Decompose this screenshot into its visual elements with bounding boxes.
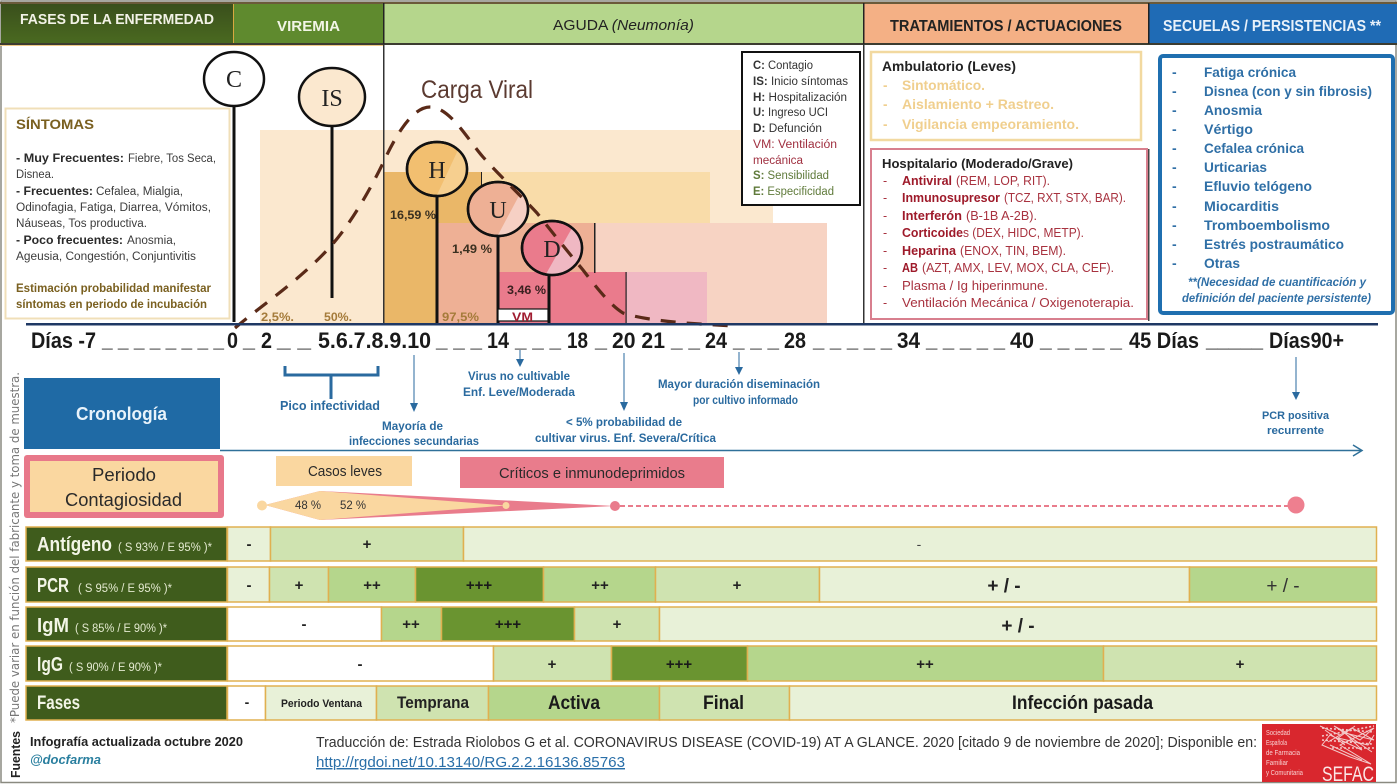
row: IgG: IgG [37, 654, 63, 676]
footer: update note: @docfarma [30, 752, 101, 767]
marker: U ingreso UCI [468, 182, 528, 323]
panel: sintomas: Cefalea, Mialgia, [96, 186, 183, 198]
panel: secuelas: Urticarias [1204, 159, 1267, 175]
panel: sintomas: Náuseas, Tos productiva. [16, 218, 147, 230]
row: PCR: ++ [363, 577, 381, 594]
axis: days: 20 21 [612, 328, 665, 353]
row: fases: - [245, 694, 250, 710]
panel: sintomas: Ageusia, Congestión, Conjuntivitis [16, 251, 196, 263]
panel: hospitalario: Hospitalario (Moderado/Grave) [882, 157, 1073, 171]
annotation: infecciones secundarias: Mayoría de [382, 421, 443, 433]
annotation: pico infectividad [280, 366, 380, 413]
header row [0, 2, 1397, 46]
panel: secuelas: - [1172, 236, 1177, 252]
row: PCR: + [733, 577, 742, 594]
marker: IS inicio sintomas: IS [321, 86, 343, 112]
row: IgM [26, 607, 1376, 641]
panel: secuelas: Estrés postraumático [1204, 236, 1344, 252]
label: criticos e inmunodeprimidos [460, 457, 724, 488]
row: fases: Final [703, 693, 744, 714]
panel: secuelas: - [1172, 83, 1177, 99]
panel: ambulatorio: - [883, 97, 888, 112]
vertical note: *Puede variar en función del fabricante y toma de muestra. [8, 372, 22, 723]
axis: days: _ _ [276, 327, 312, 352]
panel: ambulatorio: - [883, 78, 888, 93]
logo: SEFAC: Sociedad [1266, 730, 1290, 737]
header row: AGUDA (Neumonía) [553, 17, 694, 34]
panel: sintomas: Odinofagia, Fatiga, Diarrea, Vómitos, [16, 202, 211, 214]
arrow: timeline [220, 445, 1362, 456]
panel: hospitalario: - [883, 296, 887, 310]
panel: sintomas: Disnea. [16, 169, 54, 181]
logo: SEFAC: de Farmacia [1266, 750, 1300, 757]
spindle: contagiousness duration [257, 491, 1304, 520]
footer: update note: Infografía actualizada octubre 2020 [30, 734, 243, 749]
panel: hospitalario: s (DEX, HIDC, METP). [963, 226, 1084, 240]
header row: VIREMIA [277, 18, 340, 35]
legend: U: Ingreso UCI [753, 107, 828, 119]
row: fases: Infección pasada [1012, 693, 1153, 714]
annotation: menos de 5 por ciento [535, 353, 717, 445]
panel: cronologia: Cronología [76, 404, 168, 424]
panel: hospitalario: - [883, 209, 887, 223]
panel: hospitalario: Corticoide [902, 226, 963, 240]
panel: secuelas: Otras [1204, 255, 1240, 271]
row: IgG [26, 646, 1376, 681]
axis: days: _ [594, 327, 608, 352]
panel: secuelas: - [1172, 140, 1177, 156]
row: PCR [26, 567, 1376, 602]
row: IgG: ++ [916, 656, 934, 673]
legend [742, 52, 860, 205]
panel: secuelas: Disnea (con y sin fibrosis) [1204, 83, 1372, 99]
axis: days: 14 [487, 328, 510, 353]
panel: secuelas: definición del paciente persistente) [1182, 291, 1371, 305]
row: PCR: - [246, 577, 252, 594]
axis: days: 0 [227, 328, 238, 353]
panel: ambulatorio [871, 52, 1141, 140]
panel: hospitalario: - [883, 261, 887, 275]
footer: citation: Traducción de: Estrada Riolobos G et al. CORONAVIRUS DISEASE (COVID-19) AT A GLANCE. 2020 [citado 9 de noviembre de 2020]; Disponible en: [316, 735, 1257, 751]
panel: hospitalario: - [883, 244, 887, 258]
panel: secuelas: - [1172, 217, 1177, 233]
axis: days: 24 [705, 328, 728, 353]
row: antigeno: ( S 93% / E 95% )* [118, 542, 213, 554]
panel: periodo contagiosidad: Periodo [92, 465, 156, 485]
panel: sintomas: Estimación probabilidad manifestar [16, 283, 212, 295]
annotation: mayor duracion [658, 352, 820, 407]
panel: secuelas [1160, 56, 1393, 313]
label: casos leves: Casos leves [308, 463, 382, 480]
panel: hospitalario: Antiviral [902, 174, 952, 188]
marker: D defuncion: D [543, 237, 561, 263]
panel: hospitalario: Interferón [902, 209, 962, 223]
row: IgM: - [302, 616, 306, 633]
row: PCR: + [295, 577, 304, 594]
footer: update note [30, 734, 243, 767]
panel: secuelas: - [1172, 64, 1177, 80]
legend: VM: Ventilación [753, 139, 837, 151]
spindle: contagiousness duration: 52 % [340, 498, 366, 512]
axis: days: 45 Días [1129, 328, 1199, 353]
axis: days: Días90+ [1269, 328, 1344, 353]
panel: hospitalario: (TCZ, RXT, STX, BAR). [1004, 191, 1126, 205]
percentages: 3,46 % [507, 283, 546, 297]
logo: SEFAC: Española [1266, 740, 1287, 747]
marker: U ingreso UCI: U [489, 198, 507, 224]
row: fases: Periodo Ventana [281, 698, 363, 710]
panel: ambulatorio: Aislamiento + Rastreo. [902, 97, 1054, 112]
row: IgG: + [548, 656, 557, 673]
percentages: 50%. [324, 310, 352, 324]
axis: days: Días -7 [31, 328, 96, 353]
panel: periodo contagiosidad: Contagiosidad [65, 490, 182, 510]
axis: days: _ [242, 327, 256, 352]
panel: hospitalario: (AZT, AMX, LEV, MOX, CLA, CEF). [922, 261, 1114, 275]
annotation: pico infectividad: Pico infectividad [280, 399, 380, 413]
row: IgM: ++ [402, 616, 420, 633]
legend: D: Defunción [753, 123, 822, 135]
marker: H hospitalizacion: H [428, 158, 446, 184]
panel: ambulatorio: Sintomático. [902, 78, 985, 93]
axis: days: 28 [784, 328, 806, 353]
panel: sintomas: Fiebre, Tos Seca, [128, 153, 216, 165]
panel: hospitalario: Plasma / Ig hiperinmune. [902, 279, 1048, 293]
legend: E: Especificidad [753, 186, 834, 198]
logo: SEFAC: y Comunitaria [1266, 770, 1303, 777]
marker: C contagio: C [226, 67, 242, 93]
legend: C: Contagio [753, 60, 813, 72]
panel: hospitalario: (ENOX, TIN, BEM). [960, 244, 1066, 258]
panel: secuelas: Anosmia [1204, 102, 1262, 118]
annotation: menos de 5 por ciento: < 5% probabilidad de [566, 417, 682, 429]
marker: IS inicio sintomas [299, 68, 365, 298]
annotation: virus no cultivable [463, 350, 576, 399]
panel: sintomas: - Muy Frecuentes: [16, 153, 124, 165]
panel: secuelas: - [1172, 159, 1177, 175]
row: IgG: +++ [666, 656, 692, 673]
annotation: virus no cultivable: Enf. Leve/Moderada [463, 387, 576, 399]
axis: days: _ _ _ _ _ _ _ _ [101, 327, 225, 352]
percentages: 97,5% [442, 310, 479, 324]
axis: days: _ _ _ [732, 327, 780, 352]
percentages: 1,49 % [452, 242, 492, 256]
row: PCR: PCR [37, 575, 69, 597]
panel: secuelas: - [1172, 198, 1177, 214]
panel: sintomas [6, 108, 230, 318]
marker: H hospitalizacion [407, 142, 467, 323]
marker: D defuncion [522, 221, 582, 323]
axis: days: _____ [1205, 327, 1264, 352]
row: antigeno: + [363, 536, 372, 553]
panel: hospitalario: - [883, 226, 887, 240]
axis: days [26, 323, 1378, 353]
VM box [498, 309, 548, 324]
panel: hospitalario: - [883, 279, 887, 293]
row: IgM: IgM [37, 615, 69, 637]
header row: FASES DE LA ENFERMEDAD [20, 11, 214, 28]
panel: hospitalario [871, 149, 1147, 319]
panel: hospitalario: - [883, 191, 887, 205]
row: antigeno: - [246, 536, 252, 553]
panel: hospitalario: AB [902, 261, 918, 275]
row: IgG: + [1236, 656, 1245, 673]
axis: days: _ _ _ _ _ [1039, 327, 1123, 352]
row: PCR: + / - [1266, 576, 1300, 597]
annotation: virus no cultivable: Virus no cultivable [468, 371, 570, 383]
panel: sintomas: - Poco frecuentes: [16, 235, 123, 247]
row: fases: Activa [548, 693, 600, 714]
axis: days: _ _ _ _ _ [812, 327, 893, 352]
row: IgG: ( S 90% / E 90% )* [69, 662, 163, 674]
panel: secuelas: **(Necesidad de cuantificación y [1188, 275, 1367, 289]
panel: ambulatorio: Vigilancia empeoramiento. [902, 117, 1079, 132]
footer: citation: http://rgdoi.net/10.13140/RG.2.2.16136.85763 [316, 755, 625, 771]
axis: days: _ _ [670, 327, 701, 352]
panel: periodo contagiosidad [24, 455, 224, 518]
panel: secuelas: Vértigo [1204, 121, 1253, 137]
row: PCR: +++ [466, 577, 492, 594]
row: PCR: ( S 95% / E 95% )* [78, 583, 173, 595]
chart: disease timeline blocks and viral load [204, 44, 1150, 328]
row: PCR: + / - [987, 576, 1021, 597]
panel: secuelas: - [1172, 255, 1177, 271]
panel: hospitalario: - [883, 174, 887, 188]
row: IgM: + [613, 616, 622, 633]
curve: carga viral [235, 107, 733, 328]
annotation: mayor duracion: Mayor duración diseminación [658, 379, 820, 391]
panel: secuelas: Miocarditis [1204, 198, 1279, 214]
axis: days: 40 [1010, 328, 1034, 353]
panel: secuelas: - [1172, 121, 1177, 137]
panel: secuelas: Fatiga crónica [1204, 64, 1296, 80]
legend: mecánica [753, 155, 804, 167]
axis: days: 2 [261, 328, 272, 353]
label: casos leves [276, 456, 412, 486]
VM box: VM [512, 310, 533, 324]
axis: days: _ _ _ _ _ [925, 327, 1006, 352]
marker: C contagio [204, 52, 264, 322]
row: fases [26, 686, 1376, 720]
annotation: infecciones secundarias: infecciones secundarias [349, 436, 479, 448]
label: Carga Viral: Carga Viral [421, 76, 533, 104]
row: antigeno [26, 527, 1376, 561]
axis: days: _ _ _ [514, 327, 562, 352]
panel: hospitalario: (B-1B A-2B). [966, 209, 1037, 223]
row: fases: Fases [37, 693, 80, 714]
row: PCR: ++ [591, 577, 609, 594]
row: antigeno: - [917, 536, 922, 552]
panel: hospitalario: Heparina [902, 244, 957, 258]
header row: TRATAMIENTOS / ACTUACIONES [890, 18, 1122, 35]
percentages: 16,59 % [390, 208, 436, 222]
footer: citation [316, 735, 1257, 771]
axis: days: 18 [567, 328, 588, 353]
annotation: mayor duracion: por cultivo informado [693, 395, 798, 407]
panel: hospitalario: Ventilación Mecánica / Oxigenoterapia. [902, 296, 1134, 310]
legend: H: Hospitalización [753, 92, 847, 104]
annotation: menos de 5 por ciento: cultivar virus. Enf. Severa/Crítica [535, 433, 717, 445]
footer: fuentes label: Fuentes [8, 731, 23, 778]
panel: hospitalario: (REM, LOP, RIT). [956, 174, 1050, 188]
annotation: infecciones secundarias [349, 355, 479, 448]
panel: cronologia [24, 378, 220, 449]
annotation: PCR positiva recurrente: PCR positiva [1262, 410, 1330, 422]
panel: secuelas: - [1172, 102, 1177, 118]
header row: SECUELAS / PERSISTENCIAS ** [1163, 18, 1382, 35]
annotation: PCR positiva recurrente [1262, 357, 1330, 437]
axis: days: _ _ _ [435, 327, 483, 352]
panel: ambulatorio: Ambulatorio (Leves) [882, 59, 1016, 74]
percentages [261, 208, 546, 324]
logo: SEFAC [1262, 724, 1376, 784]
row: IgM: ( S 85% / E 90% )* [75, 623, 168, 635]
row: fases: Temprana [397, 694, 470, 712]
panel: secuelas: Cefalea crónica [1204, 140, 1304, 156]
axis: days: 34 [897, 328, 921, 353]
row: IgM: + / - [1001, 616, 1035, 637]
legend: S: Sensibilidad [753, 170, 829, 182]
panel: sintomas: síntomas en periodo de incubación [16, 299, 207, 311]
panel: secuelas: Tromboembolismo [1204, 217, 1330, 233]
label: criticos e inmunodeprimidos: Críticos e inmunodeprimidos [499, 465, 685, 482]
panel: secuelas: Efluvio telógeno [1204, 178, 1312, 194]
legend: IS: Inicio síntomas [753, 76, 848, 88]
panel: sintomas: SÍNTOMAS [16, 116, 94, 132]
logo: SEFAC: Familiar [1266, 760, 1289, 767]
percentages: 2,5%. [261, 310, 294, 324]
annotation: PCR positiva recurrente: recurrente [1267, 425, 1324, 437]
row: antigeno: Antígeno [37, 534, 112, 556]
panel: secuelas: - [1172, 178, 1177, 194]
axis: days: 5.6.7.8.9.10 [318, 328, 431, 353]
panel: ambulatorio: - [883, 117, 888, 132]
panel: sintomas: Anosmia, [127, 235, 176, 247]
spindle: contagiousness duration: 48 % [295, 498, 321, 512]
panel: sintomas: - Frecuentes: [16, 186, 93, 198]
panel: hospitalario: Inmunosupresor [902, 191, 1000, 205]
row: IgM: +++ [495, 616, 521, 633]
row: IgG: - [358, 656, 362, 673]
